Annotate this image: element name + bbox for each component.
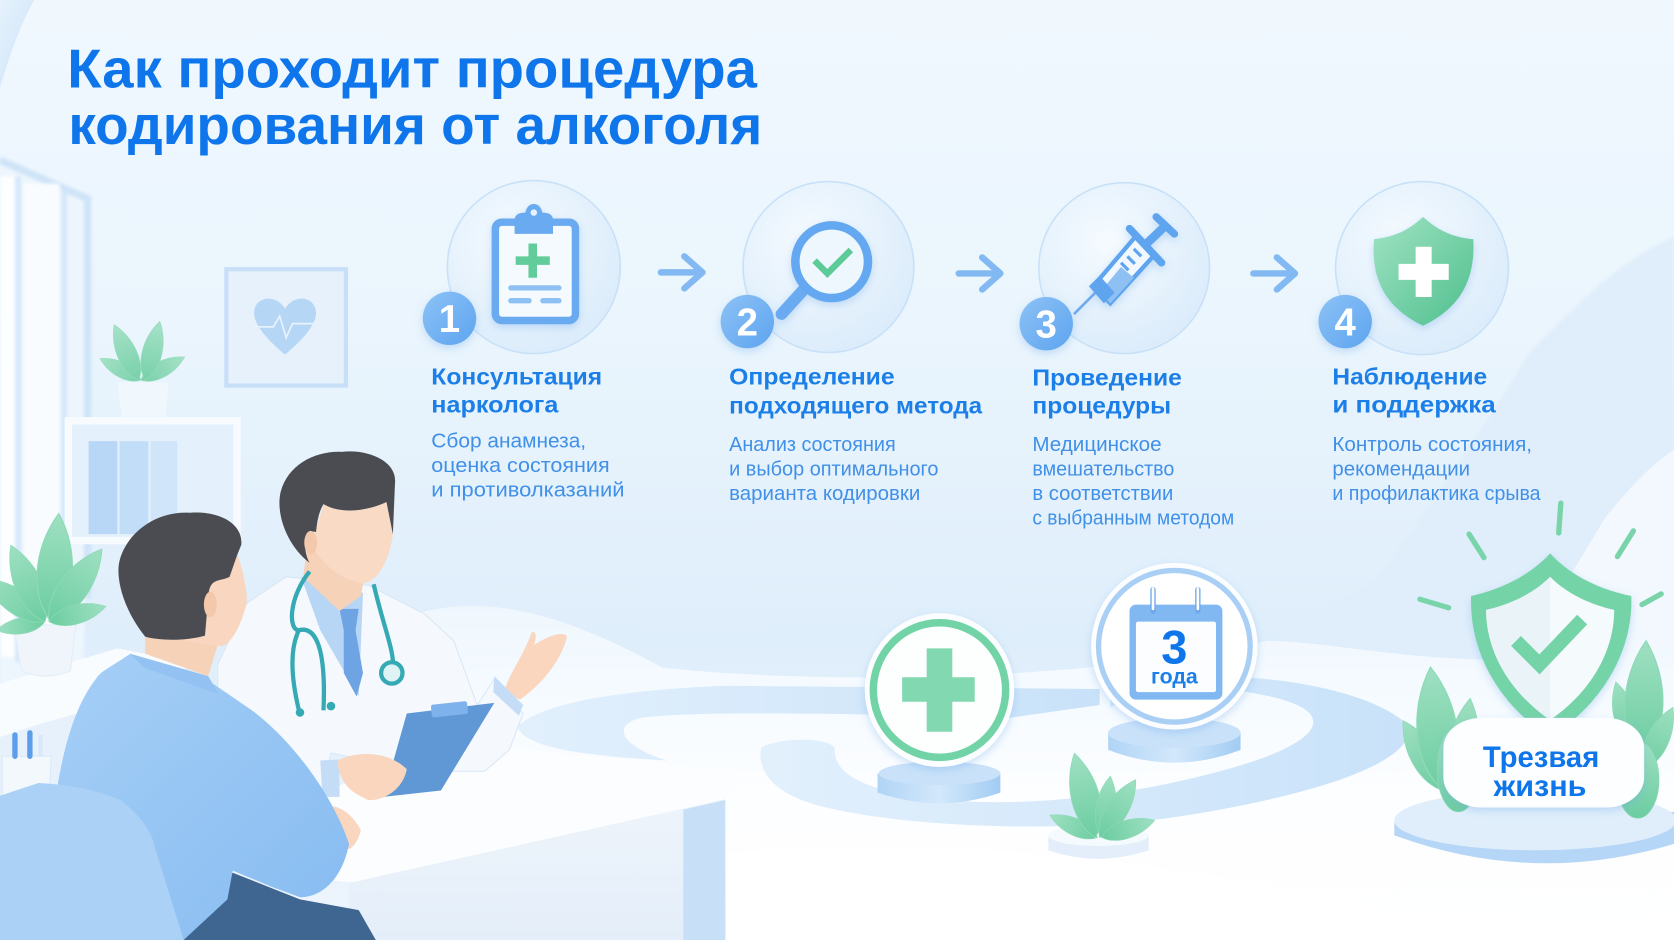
heading: и поддержка <box>1332 391 1497 417</box>
sweater <box>56 654 349 940</box>
title: Как проходит процедура <box>67 39 758 100</box>
heading <box>1032 365 1182 418</box>
arrow 2 <box>959 257 1000 289</box>
base disc <box>1394 812 1674 863</box>
heading: подходящего метода <box>729 392 983 418</box>
raised hand <box>504 632 567 700</box>
description: Анализ состояния <box>729 434 896 456</box>
framed heart picture <box>226 269 346 386</box>
heading: нарколога <box>431 391 559 417</box>
badge <box>1318 295 1372 348</box>
goal: sober life shield <box>1392 503 1674 863</box>
pen cup <box>2 733 51 796</box>
label <box>1483 741 1599 803</box>
heading: процедуры <box>1032 392 1171 418</box>
description: рекомендации <box>1332 458 1470 480</box>
neck <box>145 630 219 676</box>
circle <box>743 182 914 352</box>
description: в соответствии <box>1032 483 1173 505</box>
badge <box>721 295 774 348</box>
pedestal <box>1443 718 1644 808</box>
coat <box>218 577 523 797</box>
description: и противолказаний <box>431 480 625 502</box>
collar <box>130 654 219 694</box>
shelf plant <box>96 319 188 417</box>
description <box>431 431 625 502</box>
heading: Наблюдение <box>1332 364 1487 390</box>
face <box>312 502 393 583</box>
window <box>0 155 91 684</box>
icon: syringe <box>1074 217 1174 314</box>
label: Трезвая <box>1483 741 1599 774</box>
description: с выбранным методом <box>1032 507 1234 529</box>
icon: shield <box>1374 217 1473 326</box>
small potted plant <box>1046 750 1158 859</box>
description: и профилактика срыва <box>1332 483 1541 505</box>
description <box>729 434 938 505</box>
description <box>1332 434 1541 505</box>
milestone: plus medallion <box>865 613 1014 803</box>
heading: Консультация <box>431 364 602 390</box>
face <box>181 553 247 646</box>
description: вмешательство <box>1032 458 1174 480</box>
circle <box>447 181 620 354</box>
desk <box>233 743 735 940</box>
shield <box>1471 553 1631 737</box>
doctor <box>218 451 567 800</box>
road <box>518 676 1409 826</box>
chair <box>0 783 184 940</box>
step 2 <box>721 182 983 505</box>
heading <box>729 364 983 418</box>
badge <box>423 292 476 345</box>
description <box>1032 434 1234 529</box>
title <box>67 39 762 156</box>
label: жизнь <box>1493 770 1586 803</box>
icon: magnifier <box>781 225 868 314</box>
heading: Определение <box>729 364 895 390</box>
left plant <box>0 512 114 676</box>
badge: 4 <box>1334 301 1356 344</box>
heading <box>1332 364 1497 417</box>
badge <box>1020 297 1073 350</box>
description: и выбор оптимального <box>729 458 938 480</box>
stethoscope <box>292 571 393 710</box>
room backdrop <box>0 155 346 844</box>
description: Контроль состояния, <box>1332 434 1532 456</box>
heading <box>431 364 602 417</box>
circle <box>1336 182 1509 355</box>
heading: Проведение <box>1032 365 1182 391</box>
arrow 1 <box>661 256 702 288</box>
hair <box>118 512 241 640</box>
pants <box>184 873 376 940</box>
shirt and tie <box>301 577 363 696</box>
badge: 2 <box>737 301 758 344</box>
shelf with binders <box>68 421 237 540</box>
step 4 <box>1318 182 1541 505</box>
ear <box>304 531 317 554</box>
badge: 1 <box>439 298 460 341</box>
milestone: 3 years calendar <box>1091 563 1258 763</box>
clipboard <box>383 701 494 797</box>
ear <box>204 592 217 617</box>
step 1 <box>423 181 625 502</box>
step 3 <box>1020 183 1234 529</box>
description: Медицинское <box>1032 434 1162 456</box>
patient hand <box>310 806 361 849</box>
milestone: 3 years calendar: 3 <box>1161 620 1187 673</box>
badge: 3 <box>1036 304 1057 347</box>
description: варианта кодировки <box>729 483 920 505</box>
description: Сбор анамнеза, <box>431 431 586 453</box>
title: кодирования от алкоголя <box>68 95 762 156</box>
rays <box>1420 503 1661 608</box>
holding hand <box>320 754 407 800</box>
patient <box>0 512 376 940</box>
description: оценка состояния <box>431 455 610 477</box>
circle <box>1039 183 1210 354</box>
hair <box>279 451 395 563</box>
icon: clipboard <box>495 204 575 320</box>
neck <box>303 545 368 611</box>
plants <box>1392 640 1674 818</box>
milestone: 3 years calendar: года <box>1151 665 1198 689</box>
arrow 3 <box>1253 257 1295 289</box>
left desk <box>0 648 187 844</box>
